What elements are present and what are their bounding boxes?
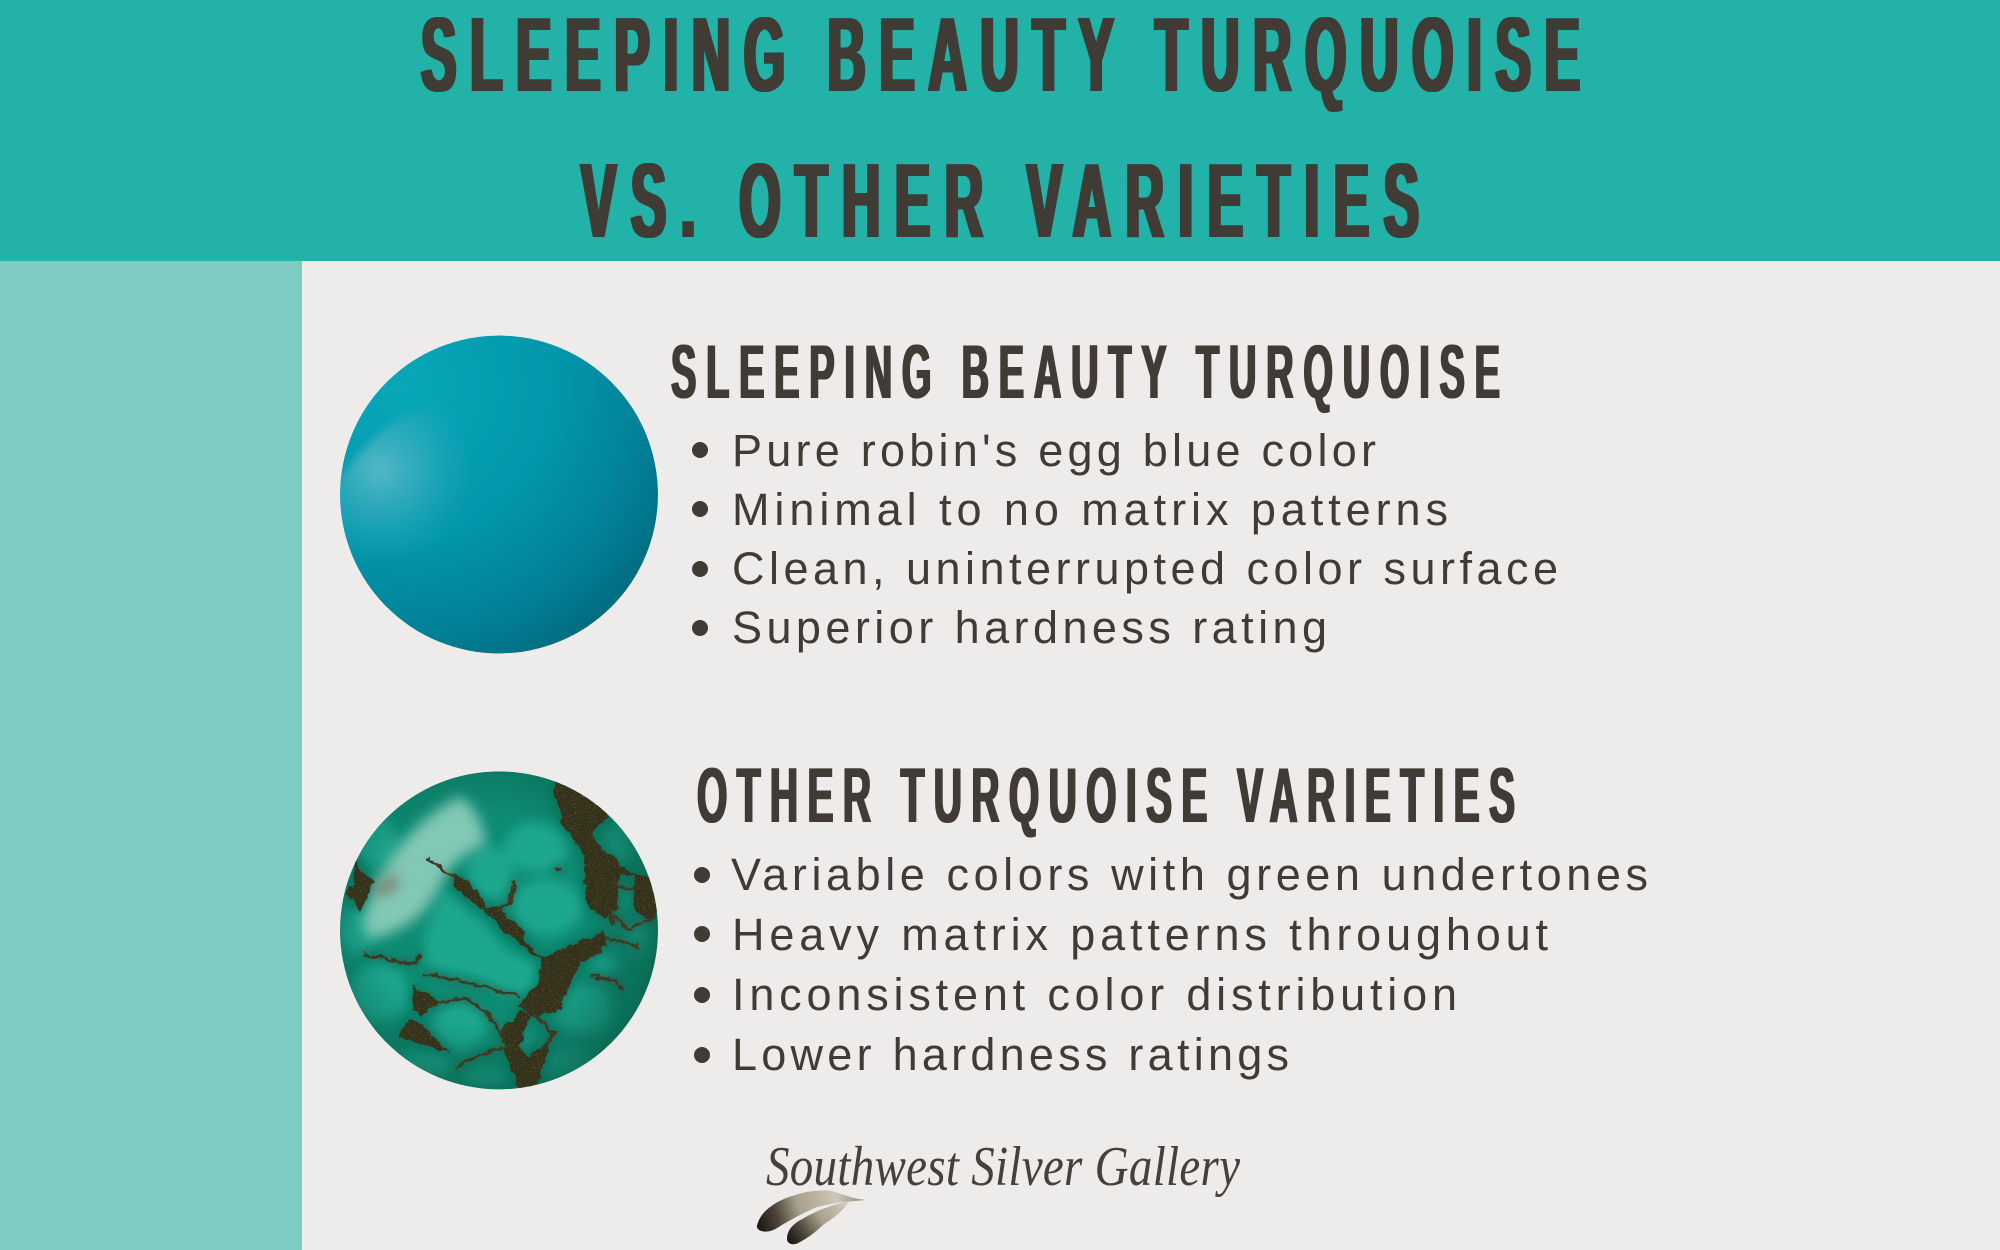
header band with title: VS. OTHER VARIETIES: [581, 141, 1419, 260]
bullet list: other variety traits: Lower hardness ratings: [732, 1029, 1289, 1080]
bullet list: Sleeping Beauty traits: Minimal to no matrix patterns: [732, 484, 1448, 535]
logo: Southwest Silver Gallery: [757, 1136, 1241, 1244]
heading: Other Turquoise Varieties: OTHER TURQUOISE VARIETIES: [697, 752, 1515, 840]
image: polished blue Sleeping Beauty turquoise cabochon: [330, 336, 658, 654]
bullet list: other variety traits: Variable colors with green undertones: [731, 849, 1648, 900]
header band with title: [0, 0, 2000, 261]
heading: Sleeping Beauty Turquoise: SLEEPING BEAUTY TURQUOISE: [671, 330, 1500, 414]
image: green turquoise cabochon with dark matrix veins: [340, 771, 660, 1090]
bullet list: other variety traits: Heavy matrix patterns throughout: [732, 909, 1548, 960]
bullet list: Sleeping Beauty traits: Superior hardness rating: [732, 602, 1327, 653]
bullet list: Sleeping Beauty traits: Pure robin's egg blue color: [732, 425, 1376, 476]
bullet list: Sleeping Beauty traits: [692, 425, 1558, 653]
bullet list: other variety traits: Inconsistent color distribution: [732, 969, 1457, 1020]
logo: Southwest Silver Gallery: Southwest Silver Gallery: [766, 1136, 1241, 1198]
bullet list: other variety traits: [694, 849, 1648, 1080]
bullet list: Sleeping Beauty traits: Clean, uninterrupted color surface: [732, 543, 1558, 594]
icon: feathers: [757, 1190, 866, 1244]
left sidebar band: [0, 261, 302, 1250]
